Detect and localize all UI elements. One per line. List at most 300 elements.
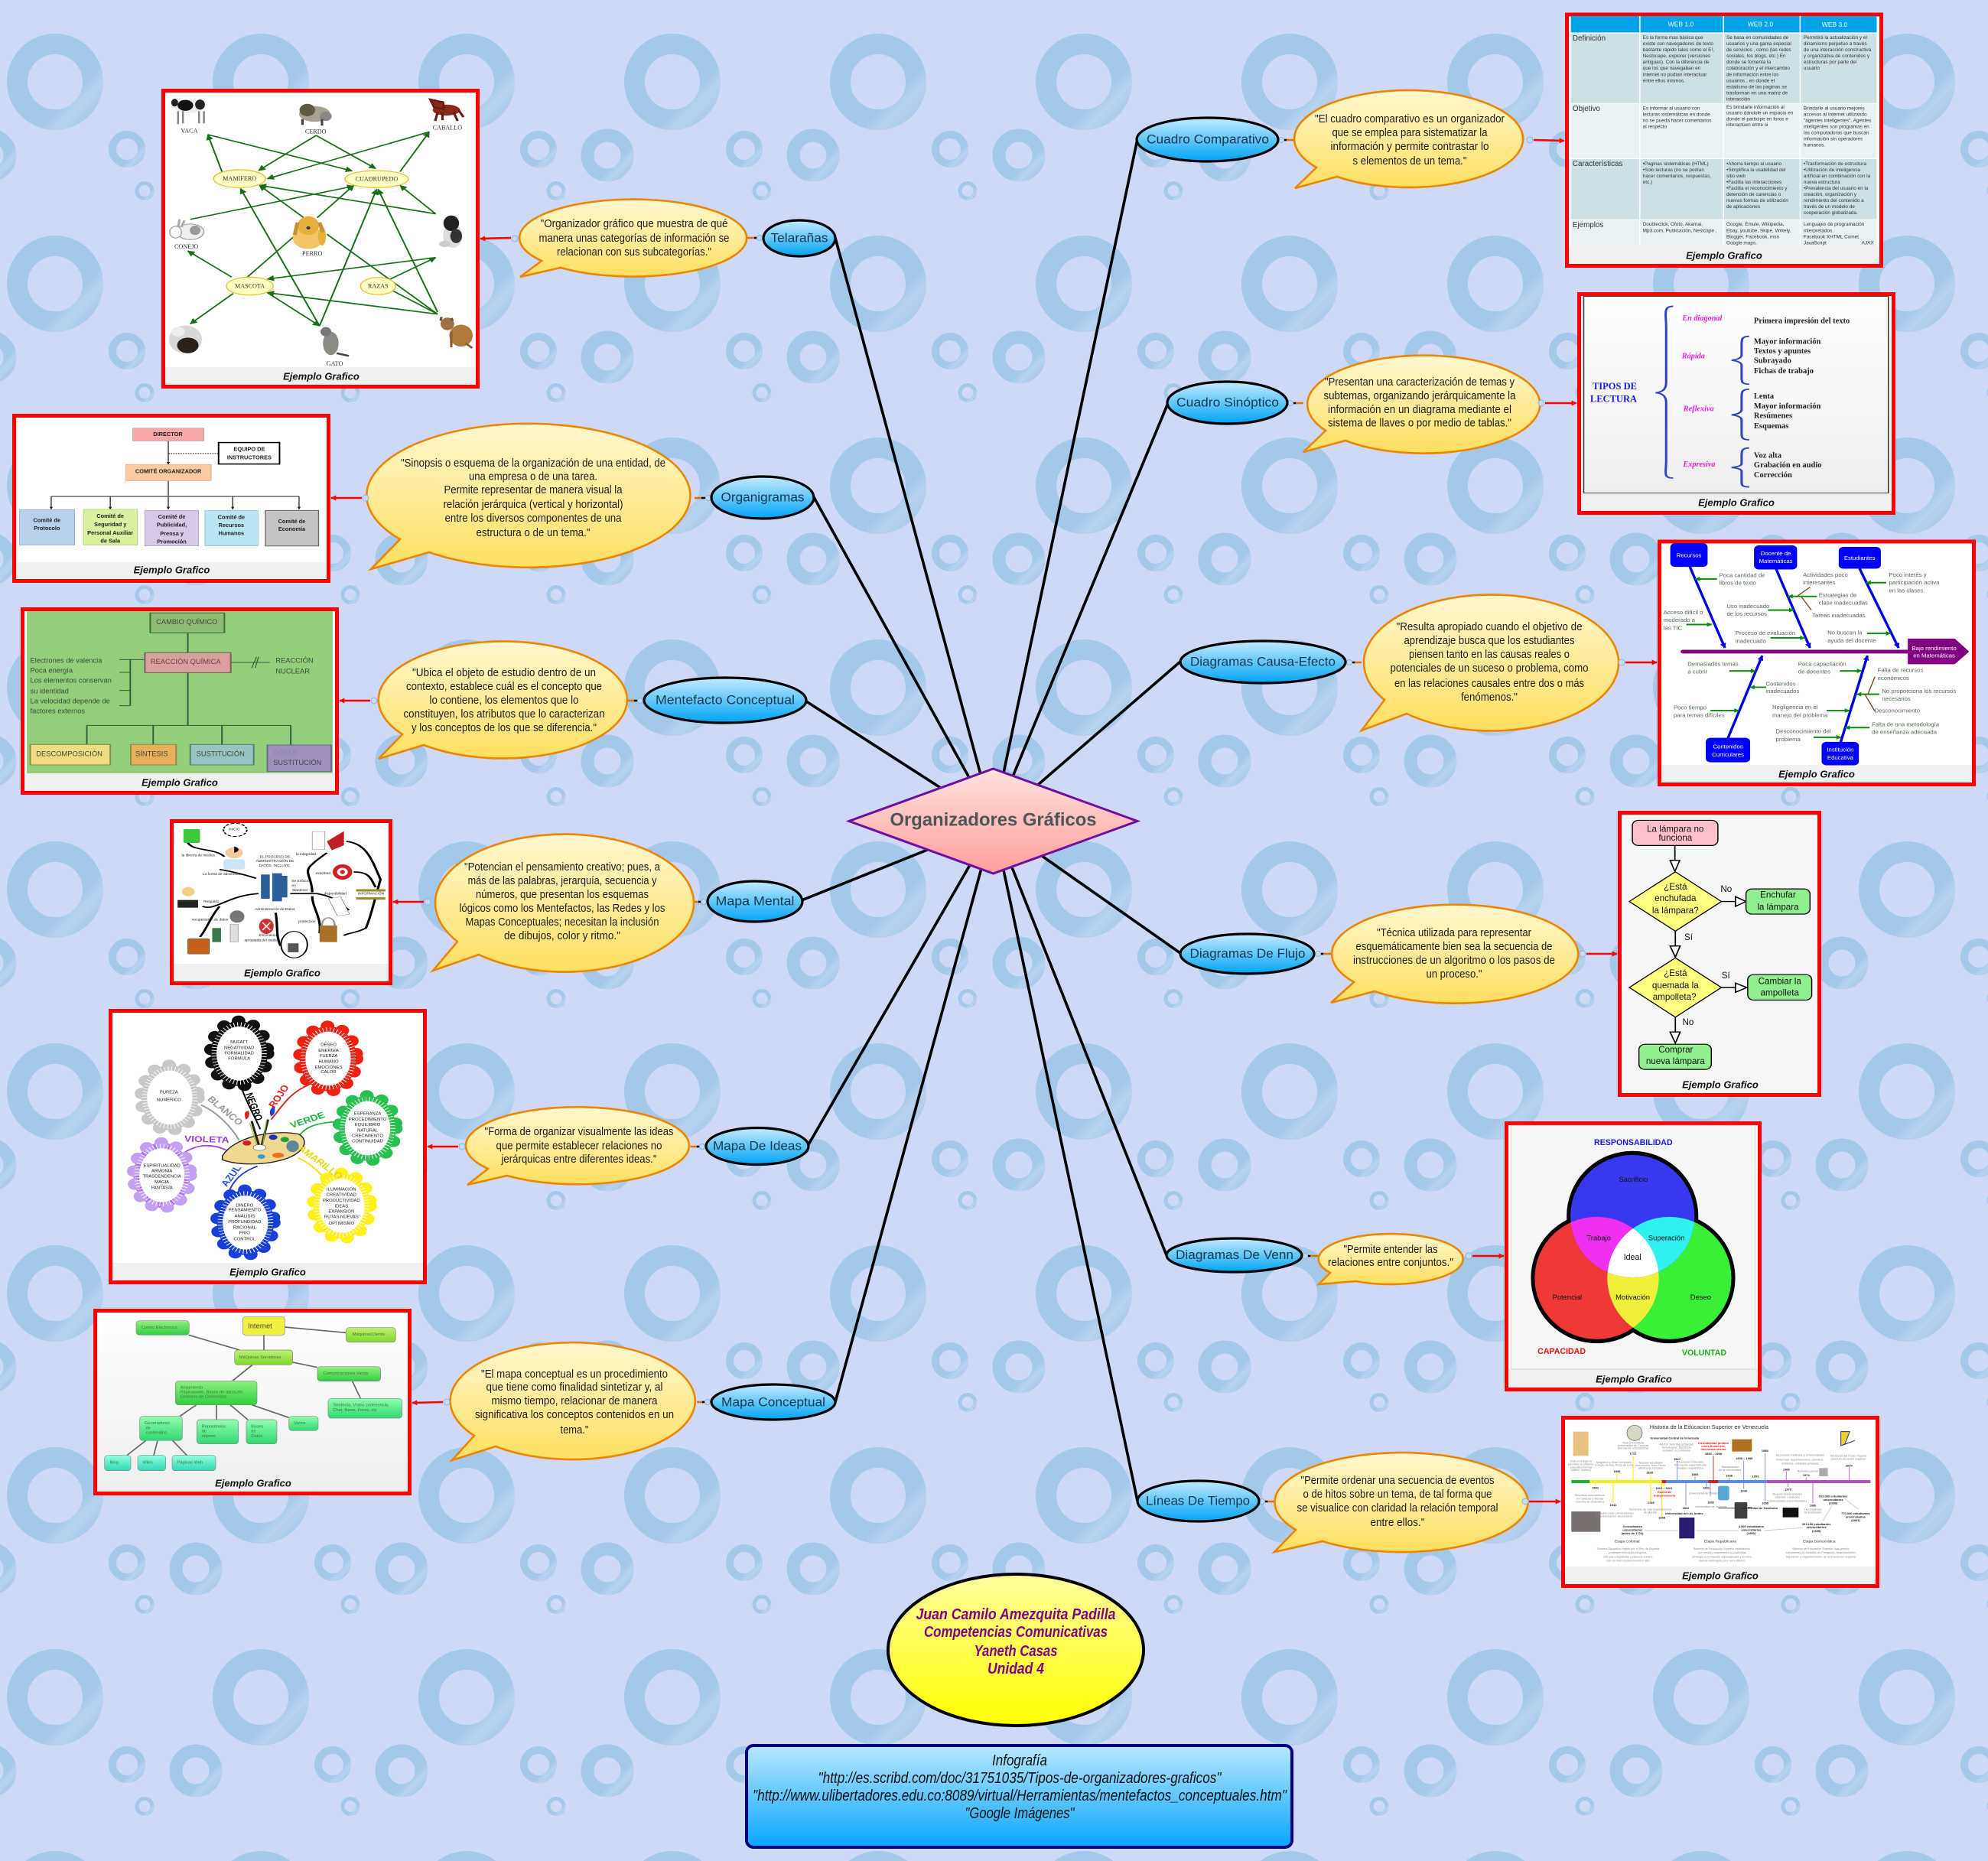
diagram: timeline of higher education: Nuevas Universidades: [1772, 1492, 1802, 1495]
diagram: reading types brace chart: LECTURA: [1590, 393, 1637, 404]
table: web 1.0 / 2.0 / 3.0 comparison: Facebook XHTML Comet: [1804, 234, 1859, 239]
node: Mapa De Ideas: Mapa De Ideas: [713, 1138, 802, 1153]
arrow: Mapa Conceptual bubble to example: [412, 1399, 450, 1405]
table: web 1.0 / 2.0 / 3.0 comparison: rendimiento del contenido a: [1804, 198, 1864, 203]
diagram: mental map: ADMINISTRACIÓN DE: [255, 858, 294, 864]
diagram: mental map: INICIO: [229, 827, 240, 831]
branch: Líneas De Tiempo: [1137, 1418, 1877, 1586]
diagram: timeline of higher education: privilegia la formación especializada y técnica,: [1692, 1555, 1752, 1558]
diagram: mentefacto on green: [27, 611, 333, 773]
table: web 1.0 / 2.0 / 3.0 comparison: Es brindarle información al: [1726, 105, 1785, 110]
connector: Venn to bubble: [1302, 1253, 1319, 1259]
panel: Cuadro Sinóptico example: Ejemplo Grafico: [1698, 497, 1775, 508]
bubble: Causa-Efecto definition: [1362, 594, 1619, 730]
diagram: org chart: Comité de: [278, 518, 305, 525]
diagram: fishbone: Poca capacitación: [1798, 660, 1846, 667]
panel: Cuadro Sinóptico example: [1579, 294, 1894, 512]
table: web 1.0 / 2.0 / 3.0 comparison: internet no podían interactuar: [1643, 72, 1707, 77]
diagram: timeline of higher education: Independencia: [1654, 1493, 1676, 1497]
node: Cuadro Sinóptico: Cuadro Sinóptico: [1176, 395, 1279, 410]
bubble: Causa-Efecto definition: fenómenos.": [1461, 691, 1518, 704]
bubble: Cuadro Sinóptico definition: subtemas, organizando jerárquicamente la: [1323, 390, 1516, 402]
panel: Líneas De Tiempo example: [1563, 1418, 1877, 1586]
references box: "http://es.scribd.com/doc/31751035/Tipos-de-organizadores-graficos": [818, 1770, 1222, 1787]
diagram: fishbone: Recursos: [1677, 551, 1702, 558]
branch: Telarañas: [164, 90, 835, 387]
node: Mapa De Ideas: [706, 1127, 809, 1164]
table: web 1.0 / 2.0 / 3.0 comparison: •Simplifica la usabilidad del: [1726, 168, 1785, 173]
bubble: Cuadro Sinóptico definition: "Presentan una caracterización de temas y: [1325, 376, 1515, 389]
table: web 1.0 / 2.0 / 3.0 comparison: Lenguajes de programación: [1804, 222, 1865, 227]
diagram: fishbone: Curriculares: [1712, 751, 1744, 758]
node: Diagramas De Venn: [1166, 1238, 1302, 1272]
diagram: timeline of higher education: Universidad de Caracas: [1618, 1444, 1648, 1447]
table: web 1.0 / 2.0 / 3.0 comparison: interacción: [1726, 96, 1750, 102]
cloud: white: [142, 1065, 198, 1131]
bubble: Organigramas definition: relación jerárquica (vertical y horizontal): [444, 499, 623, 511]
cloud: black: FÓRMULA: [228, 1056, 250, 1061]
panel: Mapa Conceptual example: Ejemplo Grafico: [215, 1478, 291, 1488]
bubble: Telarañas definition: "Organizador gráfico que muestra de qué: [540, 218, 728, 230]
diagram: fishbone: Desconocimiento del: [1776, 728, 1831, 735]
bubble: Venn definition: relaciones entre conjuntos.": [1328, 1257, 1453, 1269]
table: web 1.0 / 2.0 / 3.0 comparison: usuario dándole un espacio en: [1726, 111, 1794, 116]
diagram: timeline of higher education: Sistema de Educación Superior establecido,: [1694, 1547, 1751, 1550]
diagram: animal web: CONEJO: [174, 243, 198, 250]
icon: university seal: [1627, 1425, 1642, 1440]
icon: bin: [281, 932, 307, 958]
diagram: timeline of higher education: Magistrar y Real Seminario: [1596, 1461, 1632, 1464]
table: web 1.0 / 2.0 / 3.0 comparison: detención de carencias o: [1726, 192, 1781, 197]
panel: Causa-Efecto example: [1660, 542, 1973, 785]
bubble: Mentefacto definition: contexto, establece cuál es el concepto que: [406, 681, 602, 693]
panel: Organigramas example: [14, 416, 329, 581]
branch: Diagramas Causa-Efecto: [1180, 542, 1973, 785]
diagram: internet concept map: Blog: [110, 1461, 119, 1466]
table: web 1.0 / 2.0 / 3.0 comparison: [1571, 16, 1876, 246]
diagram: internet concept map: Bases: [251, 1425, 263, 1430]
diagram: fishbone: Falta de una metodología: [1872, 721, 1940, 727]
diagram: venn: Sacrificio: [1619, 1175, 1648, 1183]
diagram: mental map: Se Enfoca: [291, 879, 309, 883]
diagram: venn: Deseo: [1690, 1293, 1711, 1301]
diagram: timeline of higher education: 1958: [1762, 1501, 1769, 1505]
bubble: Cuadro Comparativo definition: [1294, 90, 1523, 188]
arrow: Venn bubble to example: [1466, 1253, 1504, 1259]
cloud: green: [339, 1095, 396, 1161]
diagram: animal web: VACA: [181, 127, 198, 134]
diagram: reading types brace chart: Subrayado: [1754, 356, 1791, 365]
cloud: yellow: RUTAS NUEVAS: [324, 1215, 359, 1220]
diagram: org chart: Comité de: [33, 517, 60, 524]
diagram: timeline of higher education: Se crearon Institutos y Universidades: [1776, 1454, 1824, 1457]
diagram: timeline of higher education: Cultura indígena: [1570, 1460, 1593, 1463]
table: web 1.0 / 2.0 / 3.0 comparison: estructuras por parte del: [1804, 60, 1856, 65]
diagram: reading types brace chart: Expresiva: [1682, 460, 1716, 469]
bubble: Mapa Conceptual definition: [451, 1342, 695, 1460]
diagram: mentefacto on green: factores externos: [31, 707, 85, 714]
icon: spaniel: [439, 216, 463, 248]
diagram: mental map: Mantener: [292, 888, 308, 893]
diagram: internet concept map: Alojamiento: [181, 1386, 203, 1391]
diagram: internet concept map: [105, 1317, 402, 1471]
diagram: org chart: Comité de: [217, 514, 245, 521]
branch: Cuadro Sinóptico: [1167, 294, 1894, 512]
table: web 1.0 / 2.0 / 3.0 comparison: través de un modelo de: [1804, 204, 1855, 210]
diagram: timeline of higher education: Ley Orgánica: [1804, 1508, 1822, 1511]
connector: Líneas De Tiempo to bubble: [1259, 1499, 1274, 1504]
panel: Venn example: Ejemplo Grafico: [1596, 1374, 1672, 1384]
cloud: red: [300, 1026, 356, 1092]
table: web 1.0 / 2.0 / 3.0 comparison: Es la forma mas básica que: [1643, 35, 1703, 41]
cloud: violet: [133, 1143, 190, 1208]
central topic: Organizadores Gráficos: [849, 769, 1137, 874]
diagram: internet concept map: Páginas Web: [177, 1461, 203, 1466]
table: web 1.0 / 2.0 / 3.0 comparison: Mp3.com, Publicación, Nestcape ,: [1643, 228, 1717, 233]
table: web 1.0 / 2.0 / 3.0 comparison: al respecto: [1643, 125, 1667, 130]
diagram: lamp flowchart: enchufada: [1654, 893, 1697, 903]
table: web 1.0 / 2.0 / 3.0 comparison: creación, organización y: [1804, 192, 1857, 197]
connector lines from central topic to branches: [802, 139, 1180, 1501]
diagram: timeline of higher education: 1980: [1810, 1503, 1817, 1507]
icon: book: [1735, 1502, 1747, 1518]
icon: rabbit: [170, 220, 204, 239]
diagram: org chart: Economía: [278, 525, 306, 532]
diagram: venn: Trabajo: [1586, 1233, 1611, 1241]
branch: Mapa Mental: [171, 822, 802, 984]
table: web 1.0 / 2.0 / 3.0 comparison: sitio web: [1726, 174, 1746, 179]
node: Mapa Conceptual: [711, 1384, 835, 1420]
diagram: fishbone: Acceso difícil o: [1664, 609, 1703, 616]
diagram: venn: Potencial: [1553, 1293, 1582, 1301]
colour labels: VERDE: [288, 1110, 327, 1131]
diagram: timeline of higher education: Rector José María Vargas: [1660, 1443, 1694, 1446]
branch: Mapa De Ideas: [110, 1011, 809, 1282]
node: Líneas De Tiempo: [1137, 1481, 1259, 1521]
diagram: reading types brace chart: Voz alta: [1754, 451, 1782, 460]
diagram: lamp flowchart: quemada la: [1652, 981, 1699, 991]
diagram: timeline of higher education: Real y Pontificia: [1622, 1442, 1645, 1445]
diagram: reading types brace chart: Lenta: [1754, 392, 1775, 401]
diagram: timeline of higher education: Inestabilidad política: [1698, 1441, 1729, 1445]
diagram: timeline of higher education: 1827: [1674, 1457, 1681, 1461]
diagram: timeline of higher education: (antes de 1722): [1622, 1531, 1644, 1535]
diagram: reading types brace chart: Esquemas: [1754, 422, 1788, 431]
table: web 1.0 / 2.0 / 3.0 comparison: interpretados.: [1804, 228, 1833, 233]
icon: oil derricks: [1732, 1440, 1752, 1452]
diagram: mentefacto on green: DOBLE: [273, 749, 298, 756]
bubble: Mapa De Ideas definition: jerárquicas entre diferentes ideas.": [501, 1153, 656, 1166]
table: web 1.0 / 2.0 / 3.0 comparison: nueva estructura: [1804, 180, 1840, 185]
bubble: Mentefacto definition: y los conceptos de los que se diferencia.": [412, 722, 597, 734]
icon: indigenous family: [1573, 1432, 1589, 1456]
diagram: fishbone: Desconocimiento: [1875, 707, 1920, 714]
diagram: timeline of higher education: en Caracas y Mérida: [1576, 1497, 1604, 1500]
bubble: Flujo definition: [1331, 905, 1578, 1004]
icon: folder: [184, 829, 200, 843]
table: web 1.0 / 2.0 / 3.0 comparison: lecturas sistemáticas en donde: [1643, 112, 1710, 117]
table: web 1.0 / 2.0 / 3.0 comparison: Brindarle al usuario mejores: [1804, 106, 1865, 111]
table: web 1.0 / 2.0 / 3.0 comparison: Doubleclick, Ofoto, Akamai,: [1643, 222, 1703, 227]
diagram: fishbone: para temas difíciles: [1674, 712, 1725, 719]
bubble: Causa-Efecto definition: piensen tanto en las causas reales o: [1409, 649, 1570, 661]
table: web 1.0 / 2.0 / 3.0 comparison: donde el participe en foros e: [1726, 116, 1788, 122]
diagram: timeline of higher education: (1990): [1829, 1501, 1838, 1505]
icon: QR: [1819, 1468, 1828, 1476]
diagram: timeline of higher education: de la Universidad: [1719, 1469, 1741, 1472]
table: web 1.0 / 2.0 / 3.0 comparison: artificial en combinación con la: [1804, 174, 1871, 179]
connector: Causa-Efecto to bubble: [1346, 659, 1362, 665]
diagram: timeline of higher education: Universidad de Maracaibo: [1689, 1492, 1723, 1495]
cloud: blue: FRÍO: [239, 1231, 250, 1236]
connector: Mapa Mental to bubble: [691, 900, 707, 904]
panel: Organigramas example: Ejemplo Grafico: [134, 564, 210, 575]
bubble: Telarañas definition: relacionan con sus subcategorías.": [557, 246, 711, 259]
node: Líneas De Tiempo: Líneas De Tiempo: [1146, 1493, 1250, 1508]
cloud: red: EMOCIONES: [315, 1066, 343, 1070]
diagram: internet concept map: MáQuinas Servidoras: [239, 1355, 281, 1360]
connector: Mentefacto to bubble: [627, 698, 643, 704]
diagram: timeline of higher education: 1592: [1592, 1485, 1599, 1489]
bubble: Causa-Efecto definition: aprendizaje busca que los estudiantes: [1404, 635, 1574, 647]
diagram: fishbone: necesarios: [1882, 695, 1911, 702]
diagram: animal web: MASCOTA: [235, 282, 265, 289]
diagram: timeline of higher education: [1568, 1423, 1871, 1562]
table: web 1.0 / 2.0 / 3.0 comparison: de servicios , como (las redes: [1726, 47, 1791, 53]
diagram: lamp flowchart: la lámpara?: [1652, 906, 1699, 916]
diagram: timeline of higher education: Nuevas facultades: [1639, 1462, 1663, 1465]
panel: Mapa Mental example: [171, 822, 390, 984]
icon: cow: [171, 99, 205, 124]
diagram: timeline of higher education: educativo formal: [1570, 1466, 1592, 1469]
diagram: mental map: exactitud: [316, 871, 330, 876]
table: web 1.0 / 2.0 / 3.0 comparison: •Paginas sistemáticas (HTML): [1643, 161, 1709, 167]
cloud: yellow: PRODUCTIVIDAD: [323, 1199, 360, 1203]
diagram: reading types brace chart: Primera impresión del texto: [1754, 317, 1850, 326]
diagram: timeline of higher education: 201.100 estudiantes: [1802, 1522, 1831, 1526]
icon: horse: [431, 99, 464, 121]
diagram: timeline of higher education: para la Educación Superior: [1831, 1457, 1866, 1460]
panel: Mentefacto example: [23, 609, 337, 792]
diagram: fishbone: Estrategias de: [1819, 592, 1856, 599]
diagram: timeline of higher education: 2004: [1846, 1463, 1853, 1467]
cloud: blue: PENSAMIENTO: [229, 1209, 262, 1213]
panel: Líneas De Tiempo example: Ejemplo Grafico: [1682, 1570, 1759, 1582]
diagram: venn: RESPONSABILIDAD: [1594, 1138, 1673, 1147]
diagram: org chart: Recursos: [219, 522, 244, 529]
node: Organigramas: Organigramas: [721, 490, 805, 505]
diagram: timeline of higher education: 513.000 estudiantes: [1819, 1494, 1848, 1498]
diagram: internet concept map: Repositorios: [202, 1425, 226, 1430]
bubble: Mapa De Ideas definition: que permite establecer relaciones no: [496, 1140, 662, 1152]
diagram: timeline of higher education: 1641: [1610, 1503, 1617, 1507]
branch: Cuadro Comparativo: [1137, 15, 1882, 266]
diagram: animal web: RAZAS: [368, 282, 389, 289]
diagram: internet concept map: Telefonía, Vídeo conferencia,: [333, 1404, 389, 1408]
bubble: Organigramas definition: Permite representar de manera visual la: [444, 484, 623, 496]
diagram: timeline of higher education: Universidad de Carabobo: [1741, 1506, 1778, 1510]
bubble: Cuadro Sinóptico definition: sistema de llaves o por medio de tablas.": [1328, 418, 1511, 430]
diagram: lamp flowchart: Sí: [1684, 932, 1694, 942]
bubble: Mentefacto definition: "Ubica el objeto de estudio dentro de un: [412, 667, 596, 679]
branch: Diagramas De Venn: [1166, 1123, 1759, 1389]
diagram: mentefacto on green: La velocidad depende de: [31, 697, 110, 704]
cloud: blue: ANÁLISIS: [235, 1213, 255, 1218]
bubble: Organigramas definition: "Sinopsis o esquema de la organización de una entidad, de: [401, 457, 665, 470]
diagram: org chart: DIRECTOR: [153, 431, 183, 438]
table: web 1.0 / 2.0 / 3.0 comparison: WEB 2.0: [1748, 21, 1773, 28]
diagram: mentefacto on green: Los elementos conservan: [31, 677, 112, 685]
table: web 1.0 / 2.0 / 3.0 comparison: Se basa en comunidades de: [1726, 35, 1789, 41]
icon: cat: [320, 327, 349, 356]
connector: Flujo to bubble: [1316, 952, 1331, 956]
diagram: mental map: en: [291, 884, 296, 888]
diagram: fishbone: Docente de: [1761, 550, 1791, 557]
bubble: Mapa Conceptual definition: significativa los conceptos contenidos en un: [475, 1409, 674, 1421]
diagram: internet concept map: de: [251, 1430, 256, 1434]
diagram: timeline of higher education: 1940 – 1960: [1736, 1456, 1753, 1460]
diagram: timeline of higher education: Tecnologías: Electricas: [1661, 1446, 1691, 1449]
diagram: org chart: Protocolo: [34, 525, 60, 532]
diagram: timeline of higher education: Universidad Central de Venezuela: [1650, 1436, 1700, 1440]
table: web 1.0 / 2.0 / 3.0 comparison: Google maps.: [1726, 240, 1757, 246]
bubble: Mentefacto definition: lo contiene, los elementos que lo: [430, 695, 578, 707]
icon: ULA seal: [1679, 1518, 1694, 1538]
icon: USB logo: [1783, 1508, 1798, 1518]
arrow: Telarañas bubble to example: [480, 236, 518, 242]
bubble: Cuadro Comparativo definition: que se emplea para sistematizar la: [1332, 127, 1488, 139]
diagram: fishbone: de docentes: [1798, 669, 1830, 675]
cloud: black: [210, 1021, 268, 1086]
branch: Diagramas De Flujo: [1180, 812, 1819, 1095]
table: web 1.0 / 2.0 / 3.0 comparison: Definición: [1573, 34, 1606, 43]
diagram: timeline of higher education: Socialización: [1721, 1466, 1739, 1469]
diagram: timeline of higher education: 1946: [1740, 1488, 1748, 1492]
diagram: reading types brace chart: Textos y apuntes: [1754, 347, 1811, 356]
diagram: fishbone: de los recursos: [1726, 610, 1767, 617]
diagram: lamp flowchart: [1629, 820, 1812, 1069]
bubble: Mapa Mental definition: lógicos como los Mentefactos, las Redes y los: [459, 903, 665, 915]
diagram: animal web: CABALLO: [433, 124, 462, 131]
diagram: timeline of higher education: universitarios: [1846, 1515, 1866, 1518]
diagram: org chart: Humanos: [219, 529, 244, 536]
diagram: mental map: La forma de administrar: [203, 872, 242, 877]
diagram: mental map: disponibilidad: [324, 891, 347, 896]
table: web 1.0 / 2.0 / 3.0 comparison: Ejemplos: [1573, 221, 1603, 229]
colour labels: NEGRO: [242, 1092, 265, 1122]
diagram: lamp flowchart: Enchufar: [1760, 890, 1796, 900]
references box: "Google Imágenes": [965, 1805, 1075, 1822]
diagram: timeline of higher education: Catedra de Gramática: [1575, 1500, 1605, 1503]
diagram: mentefacto on green: REACCIÓN: [275, 656, 314, 664]
diagram: timeline of higher education: Colegio de Sta. Rosa de Lima: [1595, 1463, 1634, 1466]
connector: Cuadro Comparativo to bubble: [1279, 138, 1295, 142]
bubble: Flujo definition: un proceso.": [1426, 968, 1482, 981]
diagram: timeline of higher education: 1830 – 1900: [1705, 1452, 1723, 1456]
diagram: mental map: apropiada del medio: [244, 938, 278, 942]
diagram: reading types brace chart: Grabación en audio: [1754, 461, 1822, 470]
bubble: Mentefacto definition: [379, 641, 627, 759]
diagram: mentefacto on green: SUSTITUCIÓN: [273, 759, 321, 766]
cloud: yellow: ILUMINACIÓN: [327, 1186, 356, 1192]
icon: briefcase: [188, 939, 210, 954]
bubble: Mapa Conceptual definition: mismo tiempo, relacionar de manera: [491, 1395, 658, 1407]
icon: pig: [299, 104, 332, 125]
bubble: Mapa Mental definition: Mapas Conceptuales; necesitan la inclusión: [465, 916, 659, 929]
diagram: org chart: INSTRUCTORES: [227, 454, 272, 460]
diagram: lamp flowchart: Sí: [1722, 971, 1731, 981]
branch: Mentefacto Conceptual: [23, 609, 806, 792]
diagram: internet concept map: Wikis: [142, 1461, 153, 1466]
diagram: lamp flowchart: ampolleta: [1761, 987, 1800, 997]
references box: [747, 1746, 1292, 1847]
bubble: Mapa Mental definition: de dibujos, color y ritmo.": [504, 930, 620, 942]
diagram: timeline of higher education: 1970: [1785, 1487, 1792, 1491]
diagram: mental map: INFORMACIÓN: [358, 890, 385, 896]
node: Mapa Mental: Mapa Mental: [716, 893, 794, 909]
diagram: timeline of higher education: universitarios: [1622, 1528, 1643, 1531]
bubble: Flujo definition: esquemáticamente bien sea la secuencia de: [1355, 941, 1553, 953]
diagram: timeline of higher education: (formación eclesiástica): [1618, 1446, 1649, 1449]
panel: Flujo example: Ejemplo Grafico: [1682, 1079, 1759, 1091]
diagram: timeline of higher education: 1953: [1752, 1474, 1759, 1478]
colour labels: ROJO: [266, 1083, 291, 1109]
arrow: Flujo bubble to example: [1580, 951, 1617, 957]
diagram: timeline of higher education: Oriental, Carabobo: [1775, 1495, 1800, 1498]
diagram: timeline of higher education: permitía un sistema: [1568, 1463, 1594, 1466]
diagram: lamp flowchart: ampolleta?: [1653, 992, 1697, 1002]
diagram: timeline of higher education: Música de Escalas,: [1638, 1466, 1664, 1469]
table: web 1.0 / 2.0 / 3.0 comparison: antiguas). Con la diferencia de: [1643, 60, 1710, 65]
diagram: venn: Superación: [1648, 1233, 1684, 1241]
arrow: Mapa Mental bubble to example: [393, 899, 431, 905]
diagram: fishbone: Matemáticas: [1759, 558, 1793, 564]
diagram: timeline of higher education: sólo para españoles y blancos criollos: [1603, 1555, 1653, 1558]
table: web 1.0 / 2.0 / 3.0 comparison: Es informar al usuario con: [1643, 106, 1700, 111]
icon: ministry logo: [1841, 1432, 1855, 1446]
diagram: internet concept map: Gestores de Contenidos: [181, 1395, 227, 1400]
diagram: timeline of higher education: 1832: [1683, 1506, 1690, 1510]
diagram: fishbone: [1664, 543, 1969, 765]
icon: crest: [1718, 1486, 1729, 1500]
panel: Mapa De Ideas example: [110, 1011, 425, 1282]
diagram: lamp flowchart: ¿Está: [1664, 968, 1687, 978]
bubble: Mapa De Ideas definition: [466, 1107, 689, 1185]
node: Mentefacto Conceptual: [644, 678, 806, 723]
bubble: Cuadro Comparativo definition: "El cuadro comparativo es un organizador: [1315, 113, 1505, 125]
diagram: fishbone: Poca cantidad de: [1720, 572, 1765, 579]
cloud: violet: ESPIRITUALIDAD: [143, 1164, 181, 1169]
diagram: mentefacto on green: Poca energía: [31, 667, 73, 675]
diagram: timeline of higher education: con un nivel socioeconómico alto: [1606, 1559, 1649, 1562]
bubble: Causa-Efecto definition: "Resulta apropiado cuando el objetivo de: [1397, 621, 1582, 633]
bubble: Líneas De Tiempo definition: entre ellos.": [1371, 1517, 1424, 1529]
diagram: mental map: Administración de Datos: [255, 907, 295, 912]
cloud: red: DESEO: [320, 1043, 337, 1047]
icon: people: [1571, 1511, 1600, 1532]
diagram: fishbone: en las clases.: [1889, 587, 1925, 594]
cloud: black: MUFATT: [230, 1040, 249, 1045]
cloud: violet: TRASCENDENCIA: [142, 1175, 181, 1179]
diagram: org chart: COMITÉ ORGANIZADOR: [135, 467, 202, 474]
table: web 1.0 / 2.0 / 3.0 comparison: bastante rápido tales como el E!,: [1643, 47, 1714, 53]
diagram: lamp flowchart: Cambiar la: [1759, 976, 1801, 986]
bubble: Líneas De Tiempo definition: [1274, 1453, 1528, 1552]
table: web 1.0 / 2.0 / 3.0 comparison: información sin operadores: [1804, 137, 1863, 142]
diagram: animal web: MAMIFERO: [223, 175, 256, 182]
diagram: animal web: PERRO: [302, 250, 322, 257]
diagram: venn: CAPACIDAD: [1537, 1347, 1586, 1356]
